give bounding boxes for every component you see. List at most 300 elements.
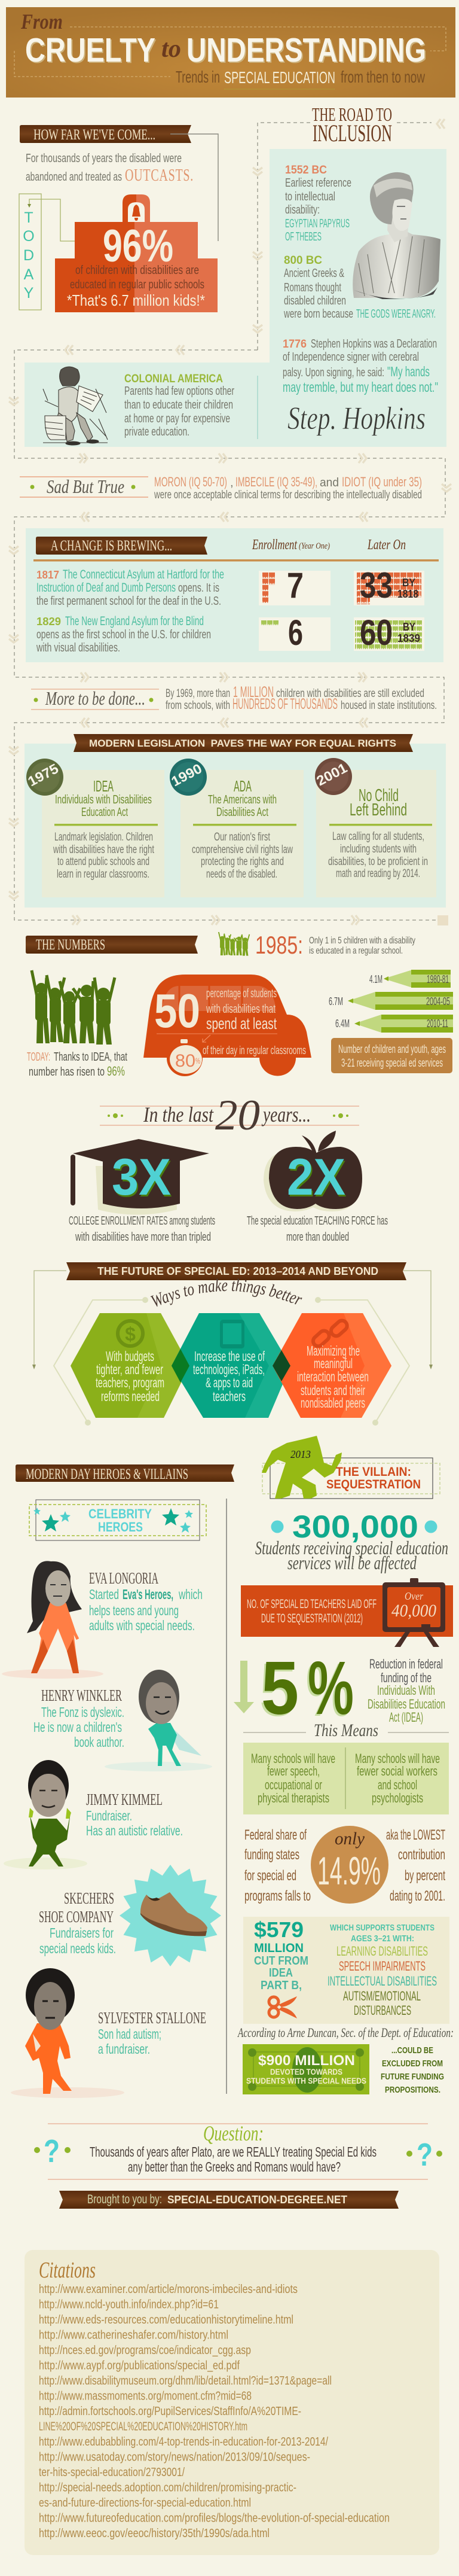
panel: modern legislation bbox=[25, 734, 446, 908]
stat: teaching force 2X: 2X bbox=[288, 1150, 347, 1208]
colonial america: Parents had few options other bbox=[124, 385, 234, 398]
hero: eva longoria: helps teens and young bbox=[89, 1603, 179, 1618]
stat: 5 percent reduction: Act (IDEA) bbox=[389, 1710, 423, 1725]
stat: teachers laid off bbox=[241, 1578, 453, 1647]
icon: apple bbox=[264, 1131, 362, 1211]
heading: in the last 20 years bbox=[100, 1091, 359, 1139]
hero: eva longoria: adults with special needs. bbox=[89, 1618, 195, 1633]
card: IDEA: Individuals with Disabilities bbox=[55, 793, 152, 806]
colonial america: COLONIAL AMERICA bbox=[124, 373, 223, 385]
citation list bbox=[39, 2283, 390, 2540]
banner: future bbox=[66, 1262, 406, 1280]
panel: citations bbox=[25, 2250, 439, 2555]
card: no child left behind bbox=[316, 770, 436, 897]
medal 1975: 1975 bbox=[25, 760, 61, 789]
stat: 14.9 percent federal share: only bbox=[335, 1829, 365, 1849]
panel: question bbox=[34, 2121, 442, 2179]
hexagon: budgets: tighter, and fewer bbox=[96, 1362, 163, 1377]
stat: 5 percent reduction: 5 bbox=[261, 1646, 299, 1730]
1829 text: The New England Asylum for the Blind bbox=[65, 614, 204, 628]
icon: stopwatch 80 percent bbox=[167, 1039, 203, 1076]
hero: jimmy kimmel: JIMMY KIMMEL bbox=[86, 1791, 163, 1808]
hero: henry winkler: The Fonz is dyslexic. bbox=[41, 1704, 124, 1720]
heading: in the last 20 years: 20 bbox=[215, 1091, 260, 1139]
stat: college enrollment 3X bbox=[69, 1139, 215, 1244]
citation list: LINE%20OF%20SPECIAL%20EDUCATION%20HISTORY.htm bbox=[39, 2420, 247, 2434]
panel: $579 million cut: DISTURBANCES bbox=[354, 2003, 411, 2018]
hexagon: budgets: With budgets bbox=[106, 1348, 154, 1364]
stat: 14.9 percent federal share: for special ed bbox=[244, 1868, 296, 1884]
1552 BC: to intellectual bbox=[285, 190, 335, 203]
hexagon: interaction bbox=[273, 1313, 391, 1418]
callout: sad but true bbox=[20, 474, 422, 501]
panel: title header: SPECIAL EDUCATION bbox=[224, 68, 335, 87]
enrollment 6: 6 bbox=[288, 613, 303, 653]
hexagon: interaction: students and their bbox=[301, 1383, 365, 1398]
banner: brought to you by bbox=[59, 2191, 399, 2209]
panel: road to inclusion timeline bbox=[25, 149, 446, 447]
stat: 1985: is educated in a regular school. bbox=[309, 946, 403, 956]
citation list: http://www.catherineshafer.com/history.html bbox=[39, 2328, 228, 2341]
panel: title header: CRUELTY bbox=[26, 32, 157, 71]
callout: sad but true: IMBECILE (IQ 35-49), bbox=[235, 474, 317, 489]
heading: celebrity heroes: CELEBRITY bbox=[88, 1506, 152, 1521]
heading: the road to inclusion: INCLUSION bbox=[313, 120, 392, 147]
hexagon: interaction: nondisabled peers bbox=[301, 1395, 365, 1411]
text: could be excluded: FUTURE FUNDING bbox=[381, 2072, 444, 2082]
card: IDEA: IDEA bbox=[93, 777, 114, 795]
panel: title header: Trends in bbox=[176, 68, 220, 86]
icon: down arrow bbox=[234, 1661, 254, 1713]
1817 text: Instruction of Deaf and Dumb Persons bbox=[36, 581, 176, 595]
card: ADA: needs of the disabled. bbox=[206, 868, 277, 881]
icon: dollar: $ bbox=[125, 1323, 136, 1345]
callout: more to be done: HUNDREDS OF THOUSANDS bbox=[232, 696, 338, 712]
panel: $579 million cut: PART B, bbox=[261, 1979, 302, 1992]
stat: 14.9 percent federal share: Federal share of bbox=[244, 1827, 307, 1843]
callout: more to be done: 1 MILLION bbox=[233, 684, 274, 701]
1552 BC: Earliest reference bbox=[285, 176, 351, 190]
panel: $579 million cut: MILLION bbox=[254, 1941, 304, 1955]
text: could be excluded: ...COULD BE bbox=[391, 2045, 433, 2056]
icon: left question mark: ? bbox=[44, 2133, 60, 2169]
800 BC: Ancient Greeks & bbox=[284, 267, 344, 280]
heading: villain bbox=[262, 1436, 440, 1499]
icon: stopwatch 80 percent: % bbox=[195, 1056, 200, 1065]
icon: stopwatch 80 percent: 80 bbox=[175, 1051, 195, 1071]
card: no child left behind: Left Behind bbox=[350, 800, 407, 820]
panel: title header: From bbox=[20, 10, 63, 34]
stat: today 96 percent: Thanks to IDEA, that bbox=[54, 1051, 127, 1064]
hero: eva longoria: which bbox=[178, 1587, 203, 1602]
hero: skechers: SHOE COMPANY bbox=[39, 1908, 114, 1926]
today vertical label: D bbox=[23, 247, 34, 264]
text: could be excluded bbox=[381, 2045, 444, 2095]
school building 96 percent: educated in regular public schools bbox=[70, 278, 204, 291]
school bus graphic: 50 bbox=[154, 984, 200, 1037]
panel: citations: Citations bbox=[39, 2258, 96, 2283]
intro text: abandoned and treated as bbox=[26, 170, 122, 184]
icon: tablet bbox=[220, 1320, 244, 1348]
citation list: http://www.ncld-youth.info/index.php?id=61 bbox=[39, 2298, 219, 2312]
heading: in the last 20 years: years... bbox=[262, 1103, 311, 1126]
pencil chart bbox=[329, 970, 453, 1073]
stat: 5 percent reduction bbox=[234, 1646, 445, 1732]
callout: sad but true: Sad But True bbox=[47, 476, 124, 497]
1829 text bbox=[36, 614, 211, 654]
pencil chart: 6.4M bbox=[335, 1018, 350, 1030]
icon: chalkboard bbox=[382, 1578, 445, 1647]
800 BC: 800 BC bbox=[284, 254, 322, 267]
heading: ways to make things better: Ways to make things better bbox=[151, 1279, 302, 1307]
stat: today 96 percent: 96% bbox=[107, 1064, 125, 1079]
school building 96 percent: 96% bbox=[103, 221, 173, 272]
panel: $579 million cut: WHICH SUPPORTS STUDENTS bbox=[330, 1923, 434, 1933]
1817 text: opens. It is bbox=[178, 581, 219, 595]
medal 2001 bbox=[314, 758, 352, 795]
card: ADA: protecting the rights and bbox=[201, 855, 284, 868]
stat: 14.9 percent federal share: funding states bbox=[244, 1847, 299, 1863]
stat: 1985 bbox=[255, 931, 415, 959]
panel: a change is brewing bbox=[26, 528, 443, 662]
hero: henry winkler: HENRY WINKLER bbox=[41, 1686, 122, 1704]
citation list: http://www.eeoc.gov/eeoc/history/35th/1990s/ada.html bbox=[39, 2527, 270, 2540]
hero: sylvester stallone: SYLVESTER STALLONE bbox=[98, 2009, 206, 2027]
today vertical label: O bbox=[23, 228, 35, 245]
enrollment 33 by 1818: BY bbox=[402, 577, 415, 589]
card: no child left behind: No Child bbox=[359, 786, 399, 805]
panel: fewer staff: physical therapists bbox=[258, 1791, 329, 1805]
stat: college enrollment 3X: with disabilities have more than tripled bbox=[75, 1231, 211, 1244]
intro text: OUTCASTS. bbox=[125, 166, 194, 185]
enrollment 7: 7 bbox=[287, 565, 304, 605]
text: could be excluded: EXCLUDED FROM bbox=[382, 2059, 443, 2069]
school bus graphic: with disabilities that bbox=[206, 1003, 276, 1016]
stat: teaching force 2X bbox=[247, 1131, 388, 1244]
panel: the villain sequestration bbox=[234, 1436, 454, 2095]
banner: how far: HOW FAR WE'VE COME... bbox=[33, 127, 155, 143]
pencil chart: 6.7M bbox=[329, 995, 343, 1007]
callout: more to be done bbox=[31, 684, 437, 712]
dashed road path bbox=[14, 123, 445, 920]
heading: this means: This Means bbox=[314, 1721, 378, 1740]
1776: 1776 bbox=[283, 338, 307, 351]
school bus graphic: percentage of students bbox=[206, 987, 277, 1000]
today vertical label bbox=[19, 194, 93, 310]
icon: greek statue bbox=[353, 172, 440, 299]
banner: legislation bbox=[74, 734, 413, 752]
panel: a change is brewing: Enrollment bbox=[252, 537, 298, 553]
panel: the future of special ed bbox=[32, 1262, 433, 1426]
1552 BC: disability: bbox=[285, 203, 320, 217]
hero: henry winkler: book author. bbox=[74, 1734, 124, 1750]
heading: villain: 2013 bbox=[290, 1448, 311, 1460]
panel: how far we've come bbox=[19, 125, 218, 312]
1817 text bbox=[36, 568, 224, 608]
heading: the road to inclusion bbox=[312, 103, 392, 147]
card: IDEA bbox=[42, 770, 164, 897]
hero: eva longoria bbox=[2, 1561, 203, 1679]
school building 96 percent: of children with disabilities are bbox=[75, 264, 199, 277]
card: ADA: comprehensive civil rights law bbox=[192, 844, 293, 856]
hero: jimmy kimmel: Fundraiser. bbox=[86, 1808, 132, 1823]
800 BC: were born because bbox=[283, 307, 353, 321]
icon: right question mark: ? bbox=[417, 2137, 433, 2173]
panel: a change is brewing: (Year One) bbox=[299, 541, 330, 551]
school building 96 percent: *That's 6.7 million kids!* bbox=[67, 291, 205, 309]
panel: a change is brewing: Later On bbox=[367, 537, 406, 553]
colonial america: at home or pay for expensive bbox=[124, 412, 230, 425]
card: ADA: Disabilities Act bbox=[216, 806, 268, 819]
banner: the numbers: THE NUMBERS bbox=[36, 937, 105, 953]
panel: title header bbox=[6, 7, 455, 98]
icon: left question mark bbox=[34, 2133, 71, 2169]
icon: dollar bbox=[118, 1321, 143, 1346]
800 BC: disabled children bbox=[284, 294, 346, 307]
enrollment 33 by 1818 bbox=[354, 565, 424, 605]
enrollment 33 by 1818: 33 bbox=[360, 565, 393, 605]
icon: chalkboard: 40,000 bbox=[391, 1601, 436, 1621]
heading: in the last 20 years: In the last bbox=[143, 1103, 214, 1126]
enrollment 33 by 1818: 1818 bbox=[397, 588, 418, 600]
panel: $579 million cut bbox=[243, 1917, 449, 2024]
citation list: http://www.aypf.org/publications/special_ed.pdf bbox=[39, 2359, 240, 2373]
hero: skechers bbox=[39, 1865, 221, 1966]
panel: celebrity heroes bbox=[2, 1500, 221, 2098]
school bus graphic: spend at least bbox=[206, 1015, 277, 1033]
stat: 5 percent reduction: % bbox=[308, 1646, 354, 1730]
banner: the numbers bbox=[26, 936, 198, 954]
today vertical label: A bbox=[24, 266, 34, 283]
panel: fewer staff: fewer speech, bbox=[267, 1764, 320, 1779]
hero: skechers: special needs kids. bbox=[39, 1941, 116, 1956]
banner: brought to you by: SPECIAL-EDUCATION-DEGREE.NET bbox=[167, 2194, 347, 2206]
card: IDEA: with disabilities have the right bbox=[53, 844, 154, 856]
hero: jimmy kimmel bbox=[4, 1760, 183, 1869]
enrollment 60 by 1839 bbox=[354, 613, 424, 653]
card: no child left behind: including students with bbox=[340, 843, 417, 855]
citation list: http://www.edubabbling.com/4-top-trends-in-education-for-2013-2014/ bbox=[39, 2435, 328, 2449]
icon: chalkboard: Over bbox=[405, 1590, 424, 1602]
1817 text: The Connecticut Asylum at Hartford for the bbox=[63, 568, 224, 581]
stat: 14.9 percent federal share bbox=[244, 1826, 445, 1904]
banner: change: A CHANGE IS BREWING... bbox=[51, 538, 172, 554]
card: ADA: ADA bbox=[234, 777, 252, 795]
school bus graphic: of their day in regular classrooms bbox=[203, 1045, 306, 1057]
stat: 1985: 1985: bbox=[255, 931, 303, 959]
colonial america bbox=[124, 373, 258, 439]
citation list: ter-hits-special-education/2793001/ bbox=[39, 2466, 185, 2479]
citation list: http://www.disabilitymuseum.org/dhm/lib/detail.html?id=1371&page=all bbox=[39, 2374, 332, 2388]
callout: more to be done: More to be done... bbox=[45, 687, 145, 709]
hexagon: budgets: teachers, program bbox=[96, 1375, 164, 1390]
panel: title header: CRUELTY bbox=[25, 31, 155, 69]
800 BC bbox=[283, 254, 436, 321]
panel: fewer staff bbox=[243, 1743, 449, 1814]
citation list: http://admin.fortschools.org/PupilServices/StaffInfo/A%20TIME- bbox=[39, 2405, 301, 2418]
today vertical label: Y bbox=[24, 285, 34, 302]
stat: 1985: Only 1 in 5 children with a disability bbox=[309, 936, 415, 946]
hexagon: technology: Increase the use of bbox=[194, 1348, 265, 1364]
hero: sylvester stallone bbox=[11, 1968, 206, 2098]
hero: skechers: Fundraisers for bbox=[50, 1925, 114, 1941]
icon: villain silhouette bbox=[262, 1436, 342, 1499]
1552 BC: 1552 BC bbox=[285, 164, 327, 176]
citation list: http://www.massmoments.org/moment.cfm?mid=68 bbox=[39, 2389, 252, 2403]
hero: eva longoria: Eva's Heroes, bbox=[123, 1587, 173, 1602]
hero: jimmy kimmel: Has an autistic relative. bbox=[86, 1823, 183, 1838]
1776 bbox=[283, 337, 438, 395]
heading: villain: THE VILLAIN: bbox=[336, 1465, 411, 1479]
hero: eva longoria: EVA LONGORIA bbox=[89, 1569, 158, 1587]
stat: 5 percent reduction: 5 bbox=[259, 1648, 297, 1732]
citation list: http://special-needs.adoption.com/children/promising-practic- bbox=[39, 2481, 296, 2495]
callout: sad but true: and bbox=[320, 476, 339, 489]
1817 text: the first permanent school for the deaf in the U.S. bbox=[36, 595, 221, 608]
hexagon: technology: & apps to aid bbox=[206, 1375, 253, 1390]
chevron arrows along the road bbox=[9, 119, 451, 925]
pencil chart: 4.1M bbox=[369, 973, 382, 985]
callout: sad but true: IDIOT (IQ under 35) bbox=[342, 474, 422, 489]
enrollment 60 by 1839: 60 bbox=[360, 613, 393, 653]
intro text: For thousands of years the disabled were bbox=[26, 152, 182, 165]
school building 96 percent bbox=[55, 194, 218, 312]
intro text bbox=[26, 152, 194, 185]
banner: modern day heroes and villains: MODERN DAY HEROES & VILLAINS bbox=[26, 1466, 188, 1482]
colonial america: than to educate their children bbox=[124, 398, 233, 412]
hexagon: technology: teachers bbox=[213, 1389, 246, 1404]
dollar bill: $900 million: DEVOTED TOWARDS bbox=[270, 2067, 342, 2076]
medal 1975 bbox=[25, 759, 63, 796]
text: could be excluded: PROPOSITIONS. bbox=[385, 2085, 440, 2095]
card: ADA bbox=[180, 770, 304, 897]
citation list: http://www.usatoday.com/story/news/nation/2013/09/10/seques- bbox=[39, 2450, 310, 2464]
1817 text: 1817 bbox=[36, 569, 59, 581]
1829 text: with visual disabilities. bbox=[36, 641, 120, 654]
1829 text: 1829 bbox=[36, 616, 61, 628]
hexagon: interaction: meaningful bbox=[314, 1356, 353, 1371]
panel: $579 million cut: IDEA bbox=[269, 1966, 293, 1980]
hero: henry winkler bbox=[33, 1670, 212, 1771]
panel: question: Question: bbox=[203, 2121, 264, 2145]
icon: right question mark bbox=[406, 2137, 442, 2173]
hero: sylvester stallone: a fundraiser. bbox=[98, 2041, 150, 2057]
card: IDEA: learn in regular classrooms. bbox=[57, 868, 149, 881]
panel: fewer staff: and school bbox=[378, 1777, 417, 1792]
hexagon: budgets bbox=[71, 1313, 189, 1418]
banner: brought to you by: Brought to you by: bbox=[87, 2193, 162, 2206]
stat: college enrollment 3X: 3X bbox=[112, 1149, 171, 1206]
hexagon: budgets: reforms needed bbox=[101, 1389, 160, 1404]
stat: college enrollment 3X: 3X bbox=[113, 1150, 172, 1208]
citation list: es-and-future-directions-for-special-education.html bbox=[39, 2496, 251, 2510]
callout: more to be done: from schools, with bbox=[166, 699, 230, 712]
stat: 14.9 percent federal share: 14.9% bbox=[317, 1849, 381, 1893]
stat: 5 percent reduction: % bbox=[306, 1648, 352, 1732]
icon: bell bbox=[132, 205, 140, 221]
panel: fewer staff: occupational or bbox=[265, 1777, 322, 1792]
stat: 14.9 percent federal share: programs falls to bbox=[244, 1888, 311, 1904]
hexagon: interaction: Maximizing the bbox=[307, 1343, 360, 1359]
1552 BC: OF THEBES bbox=[285, 230, 322, 243]
icon: graduation cap bbox=[71, 1139, 209, 1214]
1552 BC: EGYPTIAN PAPYRUS bbox=[285, 217, 350, 230]
1552 BC bbox=[285, 164, 351, 243]
colonial america: private education. bbox=[124, 425, 189, 439]
callout: sad but true: , bbox=[230, 476, 234, 489]
medal 1990: 1990 bbox=[169, 760, 204, 789]
panel: fewer staff: psychologists bbox=[372, 1791, 423, 1805]
hero: henry winkler: He is now a children's bbox=[33, 1719, 122, 1735]
banner: legislation: MODERN LEGISLATION PAVES THE WAY FOR EQUAL RIGHTS bbox=[89, 738, 396, 749]
card: IDEA: Education Act bbox=[81, 806, 128, 819]
card: IDEA: Landmark legislation. Children bbox=[54, 831, 153, 844]
card: ADA: Our nation's first bbox=[214, 831, 270, 844]
hexagon: interaction: interaction between bbox=[297, 1369, 369, 1384]
stat: college enrollment 3X: COLLEGE ENROLLMENT RATES among students bbox=[69, 1214, 215, 1228]
panel: fewer staff: Many schools will have bbox=[251, 1751, 335, 1766]
stat: 5 percent reduction: funding of the bbox=[381, 1670, 432, 1685]
icon: scissors bbox=[269, 1996, 297, 2018]
panel: $579 million cut: CUT FROM bbox=[254, 1954, 308, 1968]
citation list: http://nces.ed.gov/programs/coe/indicator_cgg.asp bbox=[39, 2344, 251, 2357]
icon: shoe bbox=[140, 1892, 207, 1936]
1776: "My hands bbox=[387, 364, 430, 379]
panel: $579 million cut: AGES 3–21 WITH: bbox=[351, 1933, 414, 1944]
panel: title header: to bbox=[161, 35, 181, 63]
callout: sad but true: MORON (IQ 50-70) bbox=[154, 474, 227, 489]
illustration: boy reading bbox=[43, 367, 108, 445]
school bus graphic bbox=[143, 975, 311, 1076]
stat: teaching force 2X: 2X bbox=[287, 1149, 345, 1206]
enrollment 60 by 1839: BY bbox=[403, 621, 415, 633]
stat: today 96 percent: TODAY: bbox=[27, 1051, 50, 1064]
stat: teaching force 2X: more than doubled bbox=[286, 1231, 349, 1244]
1776: palsy. Upon signing, he said: bbox=[283, 366, 384, 379]
stat: 300,000 students bbox=[255, 1509, 448, 1573]
icon: children silhouette bbox=[32, 970, 115, 1045]
citation list: http://www.eds-resources.com/educationhistorytimeline.html bbox=[39, 2313, 293, 2327]
hero: eva longoria: Started bbox=[89, 1587, 119, 1602]
stat: teachers laid off: DUE TO SEQUESTRATION (2012) bbox=[261, 1612, 363, 1625]
stat: today 96 percent: number has risen to bbox=[29, 1065, 105, 1079]
stat: 300,000 students: 300,000 bbox=[292, 1509, 418, 1545]
panel: the numbers bbox=[26, 931, 453, 1079]
dollar bill: $900 million: STUDENTS WITH SPECIAL NEEDS bbox=[246, 2076, 366, 2085]
hero: sylvester stallone: Son had autism; bbox=[98, 2026, 161, 2042]
enrollment 6 bbox=[259, 613, 331, 653]
icon: small children 1985 bbox=[219, 932, 249, 956]
hexagon: technology: technologies, iPads, bbox=[193, 1362, 265, 1377]
hexagon: technology bbox=[172, 1313, 290, 1418]
heading: villain: SEQUESTRATION bbox=[326, 1478, 421, 1491]
medal 1990 bbox=[169, 759, 207, 796]
1829 text: opens as the first school in the U.S. for children bbox=[36, 628, 211, 641]
hero: skechers: SKECHERS bbox=[64, 1889, 114, 1907]
dollar bill: $900 million bbox=[243, 2044, 369, 2094]
stat: today 96 percent bbox=[27, 1051, 127, 1079]
card: ADA: The Americans with bbox=[208, 793, 277, 806]
callout: more to be done: By 1969, more than bbox=[166, 687, 230, 700]
heading: celebrity heroes: HEROES bbox=[98, 1520, 143, 1534]
enrollment 60 by 1839: 1839 bbox=[397, 632, 420, 644]
800 BC: Romans thought bbox=[284, 281, 341, 294]
heading: the road to inclusion: THE ROAD TO bbox=[312, 103, 392, 125]
dollar bill: $900 million: $900 MILLION bbox=[258, 2053, 355, 2069]
panel: question: any better than the Greeks and Romans would have? bbox=[128, 2159, 341, 2175]
card: IDEA: to attend public schools and bbox=[57, 855, 149, 868]
panel: $579 million cut: $579 bbox=[254, 1917, 304, 1942]
